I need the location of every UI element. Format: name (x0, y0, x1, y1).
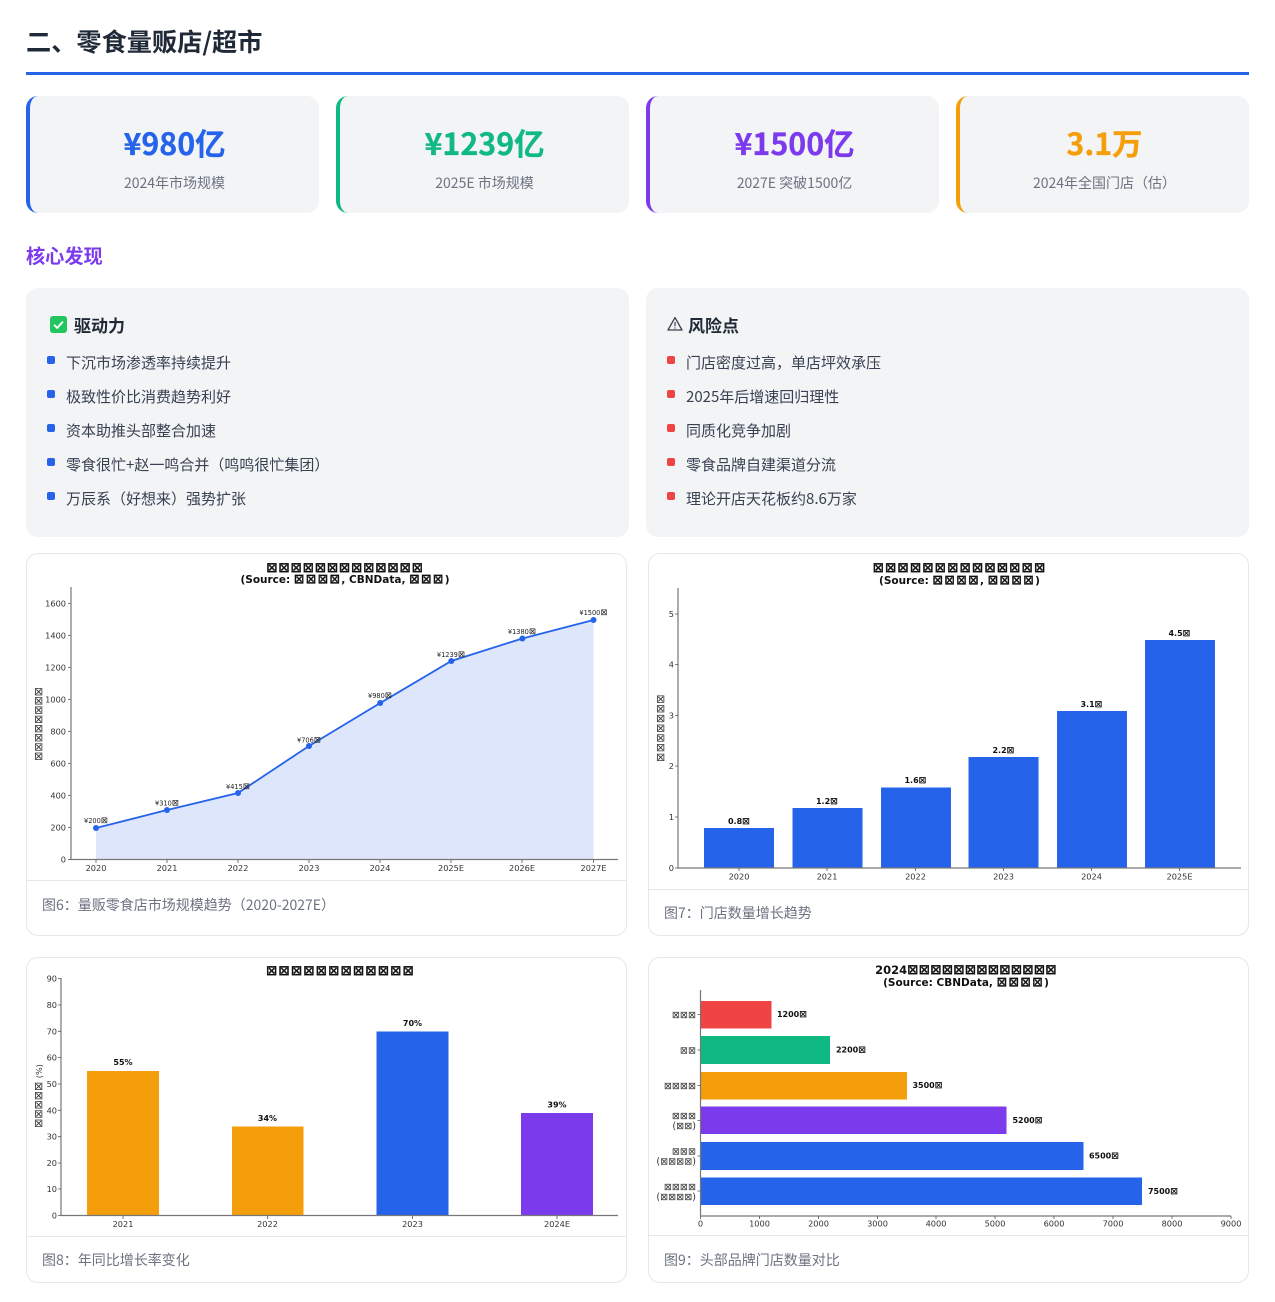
bar value labels: 3500⊠ (912, 1080, 943, 1091)
bar chart (32, 963, 618, 1229)
y axis label: ⊠⊠⊠⊠⊠⊠⊠ (654, 694, 667, 762)
axes: 0 (669, 863, 674, 873)
data labels: ¥310⊠ (155, 798, 179, 808)
y axis label: ⊠⊠⊠⊠⊠ (%) (32, 1064, 45, 1128)
data labels: ¥1239⊠ (437, 650, 465, 660)
data labels: ¥200⊠ (84, 816, 108, 826)
icon: warning triangle (667, 316, 683, 331)
axes: 2000 (808, 1218, 829, 1228)
bar value labels: 55% (113, 1058, 133, 1067)
bar value labels: 5200⊠ (1012, 1115, 1043, 1126)
axes: 2022 (228, 863, 248, 873)
chart title: ⊠⊠⊠⊠⊠⊠⊠⊠⊠⊠⊠⊠⊠⊠ (873, 560, 1046, 576)
data labels: ¥1500⊠ (579, 608, 608, 618)
stat value: 3.1万 (1066, 120, 1143, 164)
bar value labels: 2.2⊠ (992, 745, 1015, 756)
axes: 2021 (817, 872, 837, 882)
list item: 2025年后增速回归理性 (686, 386, 839, 407)
axes: 10 (47, 1184, 57, 1194)
chart title: (Source: ⊠⊠⊠⊠, ⊠⊠⊠⊠) (879, 572, 1040, 587)
list item: 零食品牌自建渠道分流 (686, 454, 836, 475)
caption: 图9：头部品牌门店数量对比 (664, 1250, 840, 1270)
category labels (656, 1010, 696, 1203)
data labels: ¥706⊠ (297, 736, 321, 746)
bars (700, 1001, 1142, 1205)
stat card: store count (956, 96, 1249, 213)
axes: 1600 (45, 598, 66, 608)
axes: 2022 (257, 1219, 278, 1229)
bar value labels: 1200⊠ (777, 1009, 807, 1020)
axes: 20 (47, 1158, 57, 1168)
bar value labels: 3.1⊠ (1080, 699, 1103, 710)
axes: 3 (669, 710, 674, 720)
axes: 800 (50, 726, 66, 736)
bar value labels (777, 1009, 1178, 1197)
axes: 2027E (580, 863, 607, 873)
list item: 万辰系（好想来）强势扩张 (66, 488, 246, 509)
list item: 同质化竞争加剧 (686, 420, 791, 441)
category labels: ⊠⊠ (680, 1046, 696, 1056)
bar value labels: 70% (403, 1019, 422, 1028)
axes: 1400 (45, 630, 66, 640)
category labels: ⊠⊠⊠ (672, 1146, 696, 1158)
axes: 2024E (544, 1219, 570, 1229)
caption: 图8：年同比增长率变化 (42, 1250, 190, 1270)
stat value: ¥1500亿 (734, 120, 855, 164)
axes: 1 (669, 812, 674, 822)
axes (698, 990, 1241, 1228)
caption: 图6：量贩零食店市场规模趋势（2020-2027E） (42, 895, 335, 915)
axes: 2022 (905, 872, 926, 882)
axes: 0 (698, 1218, 703, 1228)
list item: 门店密度过高，单店坪效承压 (686, 352, 881, 373)
stat card: 2027E market size (646, 96, 939, 213)
y axis label: ⊠⊠⊠⊠⊠⊠⊠⊠ (32, 687, 45, 761)
chart title: (Source: CBNData, ⊠⊠⊠⊠) (883, 974, 1049, 989)
category labels: ⊠⊠⊠⊠ (664, 1081, 696, 1092)
caption (27, 880, 626, 936)
axes: 70 (47, 1026, 57, 1036)
chart title: 2024⊠⊠⊠⊠⊠⊠⊠⊠⊠⊠⊠⊠⊠ (875, 962, 1057, 978)
trend line (93, 617, 596, 831)
bar value labels: 7500⊠ (1148, 1186, 1178, 1197)
caption: 图7：门店数量增长趋势 (664, 903, 812, 923)
list item: 极致性价比消费趋势利好 (66, 386, 231, 407)
axes: 2024 (370, 863, 390, 873)
stat label: 2025E 市场规模 (435, 172, 534, 192)
data labels: ¥980⊠ (368, 691, 392, 701)
axes: 5000 (985, 1218, 1005, 1228)
axes: 1200 (45, 662, 66, 672)
bar value labels: 1.6⊠ (904, 775, 927, 786)
list item: 下沉市场渗透率持续提升 (66, 352, 231, 373)
axes: 600 (50, 758, 66, 768)
axes: 2025E (438, 863, 464, 873)
panel: drivers (26, 288, 629, 537)
chart title: ⊠⊠⊠⊠⊠⊠⊠⊠⊠⊠⊠⊠⊠ (266, 560, 424, 576)
axes: 2 (669, 761, 674, 771)
axes: 6000 (1044, 1218, 1064, 1228)
area fill (96, 620, 594, 860)
axes: 50 (47, 1079, 57, 1089)
axes: 400 (50, 790, 66, 800)
stat label: 2024年市场规模 (124, 172, 225, 192)
axes (669, 588, 1241, 882)
bar value labels: 2200⊠ (836, 1044, 866, 1056)
panel: store count chart (648, 553, 1249, 936)
axes: 2020 (86, 863, 106, 873)
category labels: (⊠⊠⊠⊠) (656, 1192, 696, 1203)
axes: 5 (669, 609, 674, 619)
panel heading: 风险点 (688, 312, 739, 337)
bar value labels (728, 628, 1191, 827)
axes: 9000 (1221, 1218, 1241, 1228)
axes: 2023 (993, 872, 1014, 882)
axes: 30 (47, 1132, 57, 1142)
data labels (84, 608, 608, 826)
bar value labels: 39% (547, 1100, 567, 1110)
panel: risks (646, 288, 1249, 537)
category labels: (⊠⊠) (672, 1121, 696, 1132)
axes: 0 (61, 854, 66, 864)
category labels: ⊠⊠⊠ (672, 1111, 696, 1122)
stat value: ¥980亿 (123, 120, 226, 164)
panel: market size chart (26, 553, 627, 936)
axes: 2024 (1081, 872, 1102, 882)
stat label: 2024年全国门店（估） (1033, 172, 1176, 192)
stat card: 2025E market size (336, 96, 629, 213)
axes: 8000 (1162, 1218, 1182, 1228)
axes: 4 (669, 660, 674, 670)
caption (27, 1236, 626, 1283)
chart title: ⊠⊠⊠⊠⊠⊠⊠⊠⊠⊠⊠⊠ (266, 963, 415, 979)
bar value labels: 0.8⊠ (728, 816, 750, 827)
caption (649, 1235, 1248, 1283)
chart title (873, 560, 1046, 587)
bar value labels: 34% (258, 1114, 277, 1123)
bar value labels: 6500⊠ (1089, 1150, 1119, 1162)
axes: 2020 (729, 872, 749, 882)
axes: 4000 (926, 1218, 946, 1228)
data labels: ¥415⊠ (226, 782, 250, 792)
section heading: 核心发现 (26, 241, 103, 269)
list item: 理论开店天花板约8.6万家 (686, 488, 857, 509)
chart title (875, 962, 1057, 989)
stat label: 2027E 突破1500亿 (737, 172, 852, 192)
bar value labels: 1.2⊠ (816, 796, 838, 807)
caption (649, 889, 1248, 936)
axes: 3000 (867, 1218, 888, 1228)
axes (47, 974, 618, 1229)
category labels: (⊠⊠⊠⊠) (656, 1156, 696, 1168)
stat value: ¥1239亿 (424, 120, 545, 164)
axes: 2021 (113, 1219, 133, 1229)
axes: 1000 (45, 694, 66, 704)
axes: 2023 (299, 863, 319, 873)
axes: 40 (47, 1105, 57, 1115)
panel: brand store comparison chart (648, 957, 1249, 1283)
icon: green check (50, 316, 67, 333)
bars (704, 640, 1215, 868)
horizontal bar chart (656, 962, 1241, 1228)
list item: 零食很忙+赵一鸣合并（鸣鸣很忙集团） (66, 454, 329, 475)
category labels: ⊠⊠⊠⊠ (664, 1182, 696, 1193)
axes: 90 (47, 974, 57, 984)
axes: 2021 (157, 863, 177, 873)
axes: 60 (47, 1053, 57, 1063)
category labels: ⊠⊠⊠ (672, 1010, 696, 1021)
axes: 2026E (509, 863, 535, 873)
panel heading: 驱动力 (74, 312, 125, 337)
data labels: ¥1380⊠ (508, 627, 536, 637)
list item: 资本助推头部整合加速 (66, 420, 216, 441)
axes (45, 587, 618, 873)
axes: 1000 (749, 1218, 770, 1228)
chart title: (Source: ⊠⊠⊠⊠, CBNData, ⊠⊠⊠) (240, 571, 450, 586)
bar value labels: 4.5⊠ (1168, 628, 1191, 639)
axes: 80 (47, 1000, 57, 1010)
axes: 2023 (402, 1219, 423, 1229)
area line chart (32, 560, 618, 873)
bar value labels (113, 1019, 567, 1123)
axes: 7000 (1103, 1218, 1123, 1228)
panel: growth rate chart (26, 957, 627, 1283)
bars (87, 1032, 593, 1216)
chart title (240, 560, 450, 586)
bar chart (654, 560, 1241, 882)
stat card: 2024 market size (26, 96, 319, 213)
axes: 2025E (1166, 872, 1193, 882)
title: 二、零食量贩店/超市 (26, 23, 262, 59)
axes: 0 (52, 1210, 57, 1220)
axes: 200 (50, 822, 66, 832)
